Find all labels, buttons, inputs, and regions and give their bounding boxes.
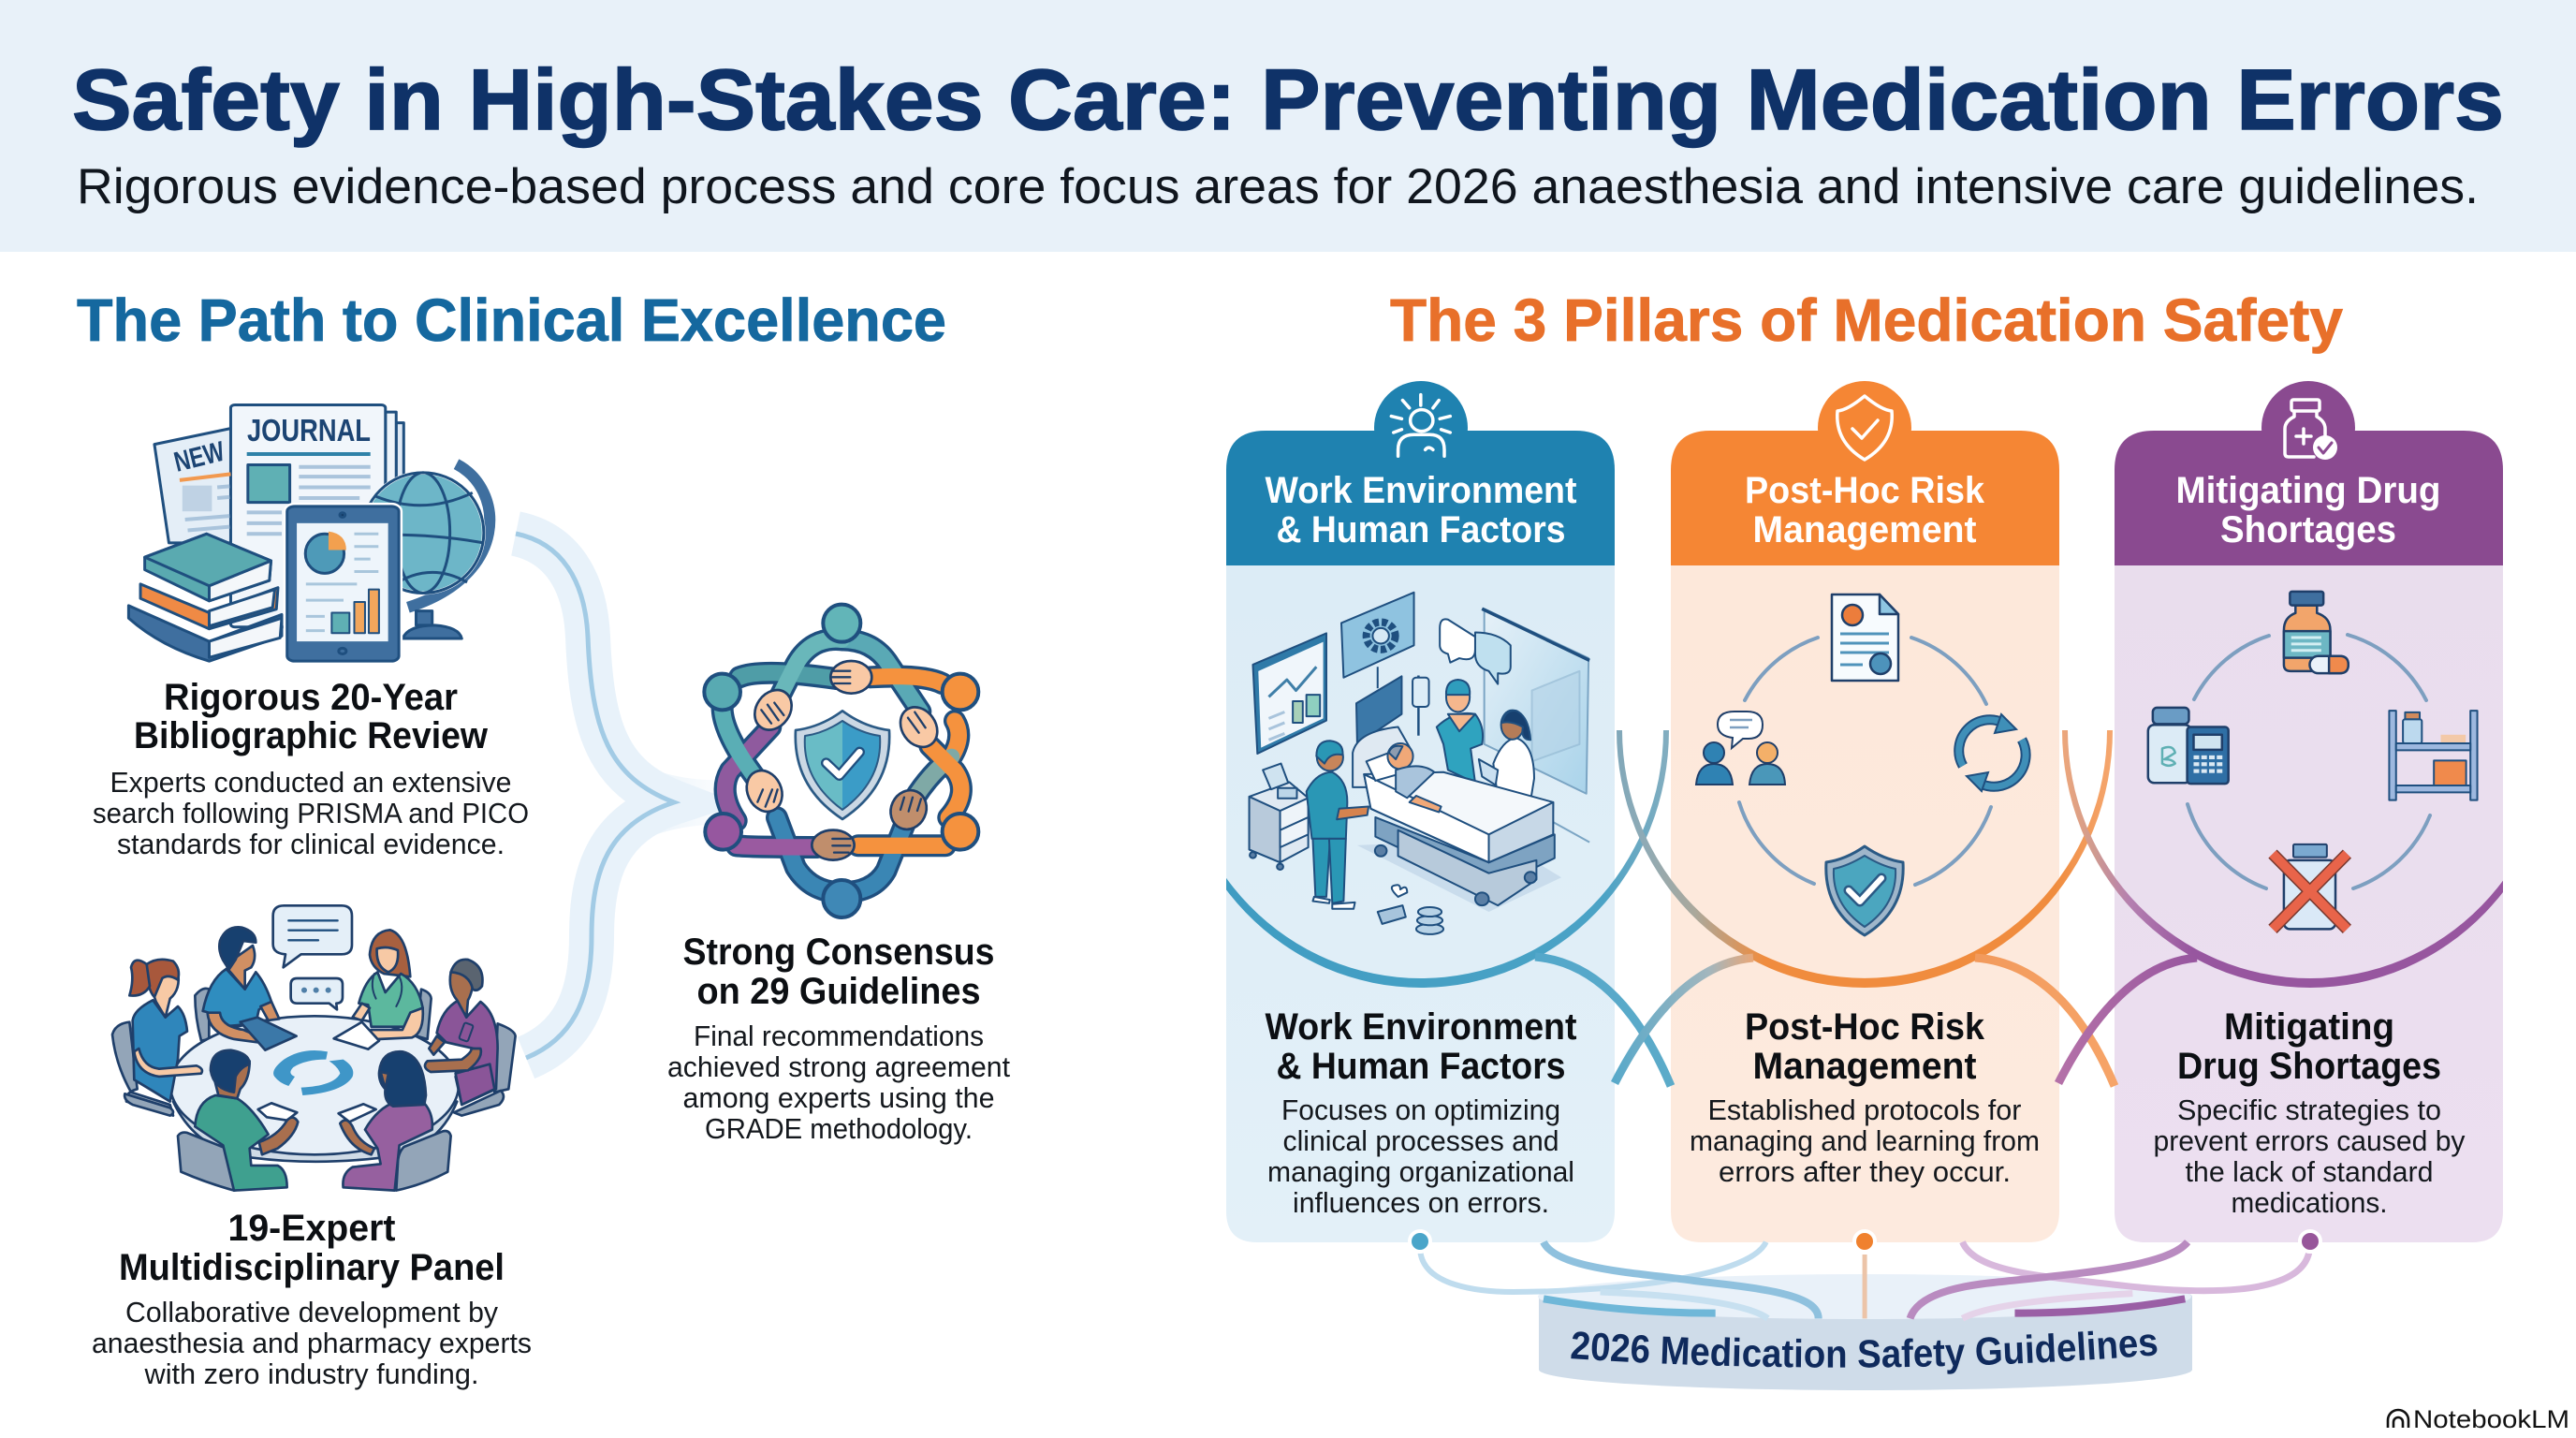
card heading on colour xyxy=(2175,470,2441,550)
card description: errors after they occur. xyxy=(1719,1155,2011,1188)
text block: expert panel: Collaborative development by xyxy=(125,1296,498,1328)
text block: strong consensus: Strong Consensus xyxy=(683,932,994,973)
doctor xyxy=(1493,738,1534,806)
bed xyxy=(1375,817,1555,890)
text block: strong consensus: on 29 Guidelines xyxy=(696,971,981,1012)
card description: medications. xyxy=(2232,1186,2387,1219)
text block: strong consensus: GRADE methodology. xyxy=(705,1112,973,1145)
card heading on colour: Shortages xyxy=(2220,509,2396,550)
text block: strong consensus: Final recommendations xyxy=(694,1020,984,1052)
panel: post-hoc risk management xyxy=(1671,381,2059,1242)
icon: person with sun rays xyxy=(1391,395,1450,456)
chairs behind xyxy=(112,989,516,1116)
person top right xyxy=(334,930,423,1049)
card description: clinical processes and xyxy=(1282,1124,1559,1157)
icon: speech bubble xyxy=(273,905,352,967)
floor items xyxy=(1392,885,1407,897)
icon: journals books tablet and globe xyxy=(128,405,490,661)
text block: strong consensus: achieved strong agreement xyxy=(667,1050,1010,1083)
card body heading xyxy=(1745,1006,1985,1087)
text block: expert panel: Multidisciplinary Panel xyxy=(119,1247,505,1288)
panel: work environment and human factors xyxy=(1226,381,1615,1242)
shield xyxy=(796,711,889,819)
title: Safety in High-Stakes Care: Preventing Medication Errors xyxy=(72,52,2504,148)
card heading on colour: & Human Factors xyxy=(1277,509,1565,550)
person right xyxy=(425,960,498,1105)
header band xyxy=(0,0,2576,252)
base platform: 2026 medication safety guidelines: 2026 Medication Safety Guidelines xyxy=(1571,1331,2157,1374)
subtitle: Rigorous evidence-based process and core focus areas for 2026 anaesthesia and intensive care guidelines. xyxy=(77,159,2479,214)
card description: Focuses on optimizing xyxy=(1281,1093,1560,1126)
connector dots xyxy=(1410,1231,2320,1252)
card header xyxy=(2115,381,2503,565)
text block: strong consensus xyxy=(667,932,1010,1145)
card heading on colour xyxy=(1745,470,1985,550)
card body heading: Drug Shortages xyxy=(2177,1046,2441,1087)
text block: expert panel: anaesthesia and pharmacy experts xyxy=(92,1327,532,1359)
text block: rigorous review: Experts conducted an extensive xyxy=(110,766,511,799)
panel: mitigating drug shortages xyxy=(2115,381,2503,1242)
icon: medicine bottle with check xyxy=(2285,400,2337,460)
text block: rigorous review xyxy=(93,677,529,860)
card description: Established protocols for xyxy=(1707,1093,2022,1126)
card heading on colour xyxy=(1266,470,1576,550)
icon: vial and calculator xyxy=(2148,708,2229,784)
icon: cycle arrows xyxy=(1959,714,2026,791)
card description: managing and learning from xyxy=(1690,1124,2040,1157)
card body heading: Post-Hoc Risk xyxy=(1745,1006,1985,1048)
icon: shelf with stock xyxy=(2389,711,2478,800)
person left xyxy=(129,960,202,1102)
card body heading: Mitigating xyxy=(2224,1006,2394,1048)
card body heading: & Human Factors xyxy=(1277,1046,1565,1087)
card heading on colour: Management xyxy=(1752,509,1977,550)
icon: drug bottle and capsule xyxy=(2284,592,2349,673)
card body heading xyxy=(2177,1006,2441,1087)
card description xyxy=(1267,1093,1574,1219)
icon text: JOURNAL: JOURNAL xyxy=(247,413,371,448)
card heading on colour: Work Environment xyxy=(1266,470,1576,511)
text block: expert panel xyxy=(92,1208,532,1390)
text block: rigorous review: Bibliographic Review xyxy=(134,715,489,756)
icon: crossed out drug bottle xyxy=(2273,844,2347,929)
heads xyxy=(704,605,978,917)
card description: the lack of standard xyxy=(2185,1155,2434,1188)
card description: prevent errors caused by xyxy=(2153,1124,2466,1157)
arm colours xyxy=(723,639,961,892)
icon: people discussing xyxy=(1696,712,1785,785)
person front left xyxy=(178,1050,298,1191)
icon text: NEW: NEW xyxy=(171,436,228,478)
card header xyxy=(1671,381,2059,565)
card description xyxy=(2153,1093,2466,1219)
cycle ring arcs xyxy=(2188,635,2430,888)
person top left xyxy=(203,927,297,1050)
card body heading: Work Environment xyxy=(1266,1006,1576,1048)
card heading on colour: Post-Hoc Risk xyxy=(1745,470,1985,511)
text block: strong consensus: among experts using the xyxy=(683,1081,994,1114)
card body heading xyxy=(1266,1006,1576,1087)
card description xyxy=(1690,1093,2040,1188)
icon: typing bubble xyxy=(291,978,343,1009)
interlocking arcs across pillars xyxy=(1173,730,2558,1086)
hands xyxy=(740,661,944,860)
icon: shield with check xyxy=(1826,846,1903,935)
person front right xyxy=(339,1051,451,1191)
card description: influences on errors. xyxy=(1293,1186,1549,1219)
table xyxy=(173,1102,457,1162)
text block: expert panel: with zero industry funding. xyxy=(144,1357,479,1390)
icon: document xyxy=(1832,594,1898,681)
nurse standing xyxy=(1437,713,1483,783)
text block: rigorous review: search following PRISMA and PICO xyxy=(93,797,529,829)
text block: rigorous review: Rigorous 20-Year xyxy=(164,677,458,718)
nurse with tablet xyxy=(1307,772,1347,839)
NotebookLM watermark: NotebookLM xyxy=(2413,1405,2569,1433)
card header xyxy=(1226,381,1615,565)
card body heading: Management xyxy=(1752,1046,1977,1087)
arrow: converging flow connector xyxy=(516,534,739,1058)
base platform: 2026 medication safety guidelines xyxy=(1408,1229,2322,1390)
cart xyxy=(1250,782,1309,862)
icon: ring arrows on table xyxy=(273,1050,353,1095)
icon: expert panel around a table xyxy=(112,905,516,1191)
icon: shield outline xyxy=(1837,396,1892,460)
text block: rigorous review: standards for clinical evidence. xyxy=(117,828,505,860)
illustration: ward with care team xyxy=(1250,593,1589,934)
platform label xyxy=(1570,1355,2160,1368)
card description: managing organizational xyxy=(1267,1155,1574,1188)
cycle ring arcs xyxy=(1739,638,1991,885)
heading: the 3 pillars of medication safety: The 3 Pillars of Medication Safety xyxy=(1390,286,2343,354)
card heading on colour: Mitigating Drug xyxy=(2175,470,2441,511)
icon: consensus circle of linked people with shield xyxy=(704,605,978,917)
text block: expert panel: 19-Expert xyxy=(228,1208,395,1249)
heading: the path to clinical excellence: The Path to Clinical Excellence xyxy=(77,286,946,354)
connectors into the platform xyxy=(1421,1242,2309,1318)
card description: Specific strategies to xyxy=(2177,1093,2441,1126)
